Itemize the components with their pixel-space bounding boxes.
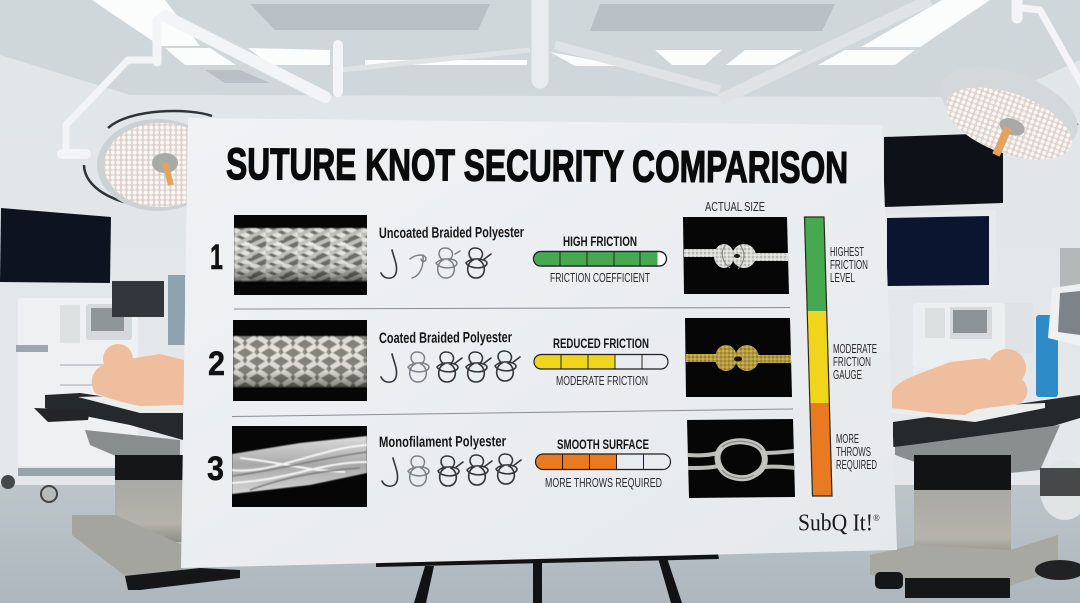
row 1 knot photo [683,217,789,294]
row 2 friction meter: MODERATE FRICTION [556,374,648,388]
row 2: coated braided polyester [208,318,792,401]
divider 1 [234,308,790,309]
comparison board [181,118,897,568]
right surgical lamp [926,50,1080,175]
wall monitors [0,133,1080,290]
surgical lamp arms [62,0,1080,154]
friction gauge [804,217,832,496]
high friction heading: HIGH FRICTION [563,234,637,249]
row 2 braid photo [233,320,367,401]
right anesthesia machine [913,284,1080,397]
gauge label: more throws: THROWS [836,445,871,459]
gauge label: more throws: REQUIRED [836,458,877,472]
row 2 knot photo [685,318,792,397]
gauge label: highest: LEVEL [830,271,855,285]
row 3 name: Monofilament Polyester [379,433,506,451]
left mannequin and operating table [34,344,240,590]
gauge label: highest: FRICTION [830,258,868,272]
gauge label: moderate: MODERATE [833,342,877,356]
row 3 strand photo [232,426,367,507]
title: SUTURE KNOT SECURITY COMPARISON [226,140,848,193]
row 3 friction meter [535,437,670,490]
smooth surface heading: SMOOTH SURFACE [557,437,649,452]
row 1 throw icons [381,248,491,278]
row 3 knot photo [687,419,795,498]
row 1 friction meter: FRICTION COEFFICIENT [550,271,650,285]
gauge label: more throws: MORE [836,432,859,446]
row 1 braid photo [234,215,368,295]
gauge label: moderate: FRICTION [833,355,871,369]
row 3 throw icons [382,454,521,486]
logo: ® [873,513,880,523]
row 2 number: 2 [208,345,225,383]
gauge label: highest: HIGHEST [830,245,864,259]
row 3: monofilament polyester [207,419,795,507]
row 1: uncoated braided polyester [210,215,789,295]
row 2 friction meter [534,336,668,388]
easel [376,554,719,603]
row 1 number: 1 [210,238,223,277]
left anesthesia machine [1,275,185,502]
actual size label: ACTUAL SIZE [705,199,765,214]
gauge label: moderate: GAUGE [833,368,862,382]
divider 2 [232,409,793,416]
ceiling beams [340,0,930,100]
recessed ceiling panels [205,4,835,83]
right mannequin and operating table [870,349,1080,598]
row 2 throw icons [381,351,520,382]
reduced friction heading: REDUCED FRICTION [553,336,649,351]
row 1 name: Uncoated Braided Polyester [379,224,524,242]
row 2 name: Coated Braided Polyester [379,329,512,347]
ceiling lights [92,0,990,66]
row 3 friction meter: MORE THROWS REQUIRED [545,476,662,490]
left surgical lamp [84,111,219,211]
logo: SubQ It! [798,510,873,536]
row 3 number: 3 [207,450,224,488]
row 1 friction meter [534,234,666,285]
